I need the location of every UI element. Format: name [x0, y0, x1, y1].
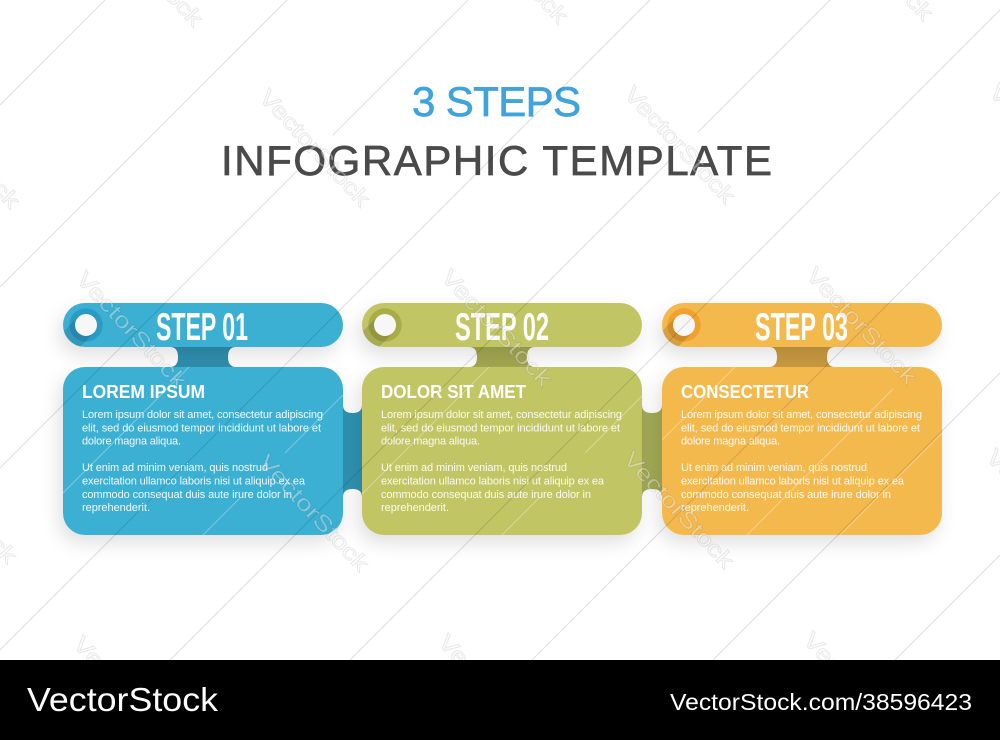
watermark: VectorStock [68, 631, 190, 740]
watermark: VectorStock [619, 81, 741, 209]
step 03 card [662, 367, 942, 535]
footer logo text: VectorStock [27, 681, 219, 718]
step 02 body text: dolore magna aliqua. [381, 436, 480, 448]
title: 3 STEPS [412, 78, 581, 125]
icon: step 02 ring [363, 308, 402, 346]
footer band [0, 660, 1000, 740]
step 03 body text: exercitation ullamco laboris nisi ut aliquip ex ea [681, 476, 905, 488]
step 01 body text: elit, sed do eiusmod tempor incididunt ut labore et [82, 422, 321, 434]
connector: step 02 to step 03 [642, 405, 662, 497]
step 03 body text: Ut enim ad minim veniam, quis nostrud [681, 462, 867, 474]
step 02 card [362, 367, 642, 535]
watermark: VectorStock [436, 264, 558, 392]
step 02 body text [381, 409, 622, 514]
step 01 body text: Lorem ipsum dolor sit amet, consectetur adipiscing [82, 409, 323, 421]
step 02 heading: DOLOR SIT AMET [381, 382, 526, 402]
step 02 body text: Lorem ipsum dolor sit amet, consectetur adipiscing [381, 409, 622, 421]
step 03 body text: Lorem ipsum dolor sit amet, consectetur adipiscing [681, 409, 922, 421]
step 01 heading: LOREM IPSUM [82, 382, 205, 402]
step 01 body text: reprehenderit. [82, 502, 150, 514]
panel: step 03 [636, 303, 942, 535]
watermark: VectorStock [254, 84, 376, 212]
step 02 body text: elit, sed do eiusmod tempor incididunt ut labore et [381, 422, 620, 434]
step 03 label: STEP 03 [755, 306, 848, 349]
step 01 body text: exercitation ullamco laboris nisi ut aliquip ex ea [82, 476, 306, 488]
step 01 body text: dolore magna aliqua. [82, 436, 181, 448]
connector: step 02 to card [469, 347, 535, 367]
step 01 body text: Ut enim ad minim veniam, quis nostrud [82, 462, 268, 474]
icon: step 03 ring [662, 308, 701, 346]
panel: step 02 [337, 303, 662, 535]
watermark: VectorStock [798, 627, 920, 740]
step 03 heading: CONSECTETUR [681, 382, 809, 402]
step 03 body text: commodo consequat duis aute irure dolor in [681, 489, 891, 501]
step 01 body text [82, 409, 323, 514]
step 02 body text: commodo consequat duis aute irure dolor in [381, 489, 591, 501]
step 03 body text: elit, sed do eiusmod tempor incididunt ut labore et [681, 422, 920, 434]
step 01 body text: commodo consequat duis aute irure dolor in [82, 489, 292, 501]
step 01 card [63, 367, 343, 535]
step 02 body text: Ut enim ad minim veniam, quis nostrud [381, 462, 567, 474]
step 02 tab [362, 303, 642, 347]
footer url: VectorStock.com/38596423 [670, 689, 972, 715]
panel: step 01 [38, 303, 362, 535]
step 03 body text [681, 409, 922, 514]
icon: step 01 ring [64, 308, 102, 346]
connector: step 01 to card [170, 347, 236, 367]
step 02 body text: reprehenderit. [381, 502, 449, 514]
title [221, 78, 772, 184]
watermark: VectorStock [71, 266, 193, 394]
watermark: VectorStock [801, 262, 923, 390]
step 03 body text: reprehenderit. [681, 502, 749, 514]
connector: step 03 to card [769, 347, 835, 367]
connector: step 01 to step 02 [343, 405, 362, 497]
title: INFOGRAPHIC TEMPLATE [221, 137, 772, 184]
watermark: VectorStock [433, 629, 555, 740]
watermark: VectorStock [618, 446, 740, 574]
step 03 body text: dolore magna aliqua. [681, 436, 780, 448]
watermark: VectorStock [253, 449, 375, 577]
step 01 tab [63, 303, 343, 347]
step 02 body text: exercitation ullamco laboris nisi ut aliquip ex ea [381, 476, 605, 488]
step 01 label: STEP 01 [156, 306, 248, 349]
step 02 label: STEP 02 [455, 306, 549, 349]
step 03 tab [662, 303, 942, 347]
